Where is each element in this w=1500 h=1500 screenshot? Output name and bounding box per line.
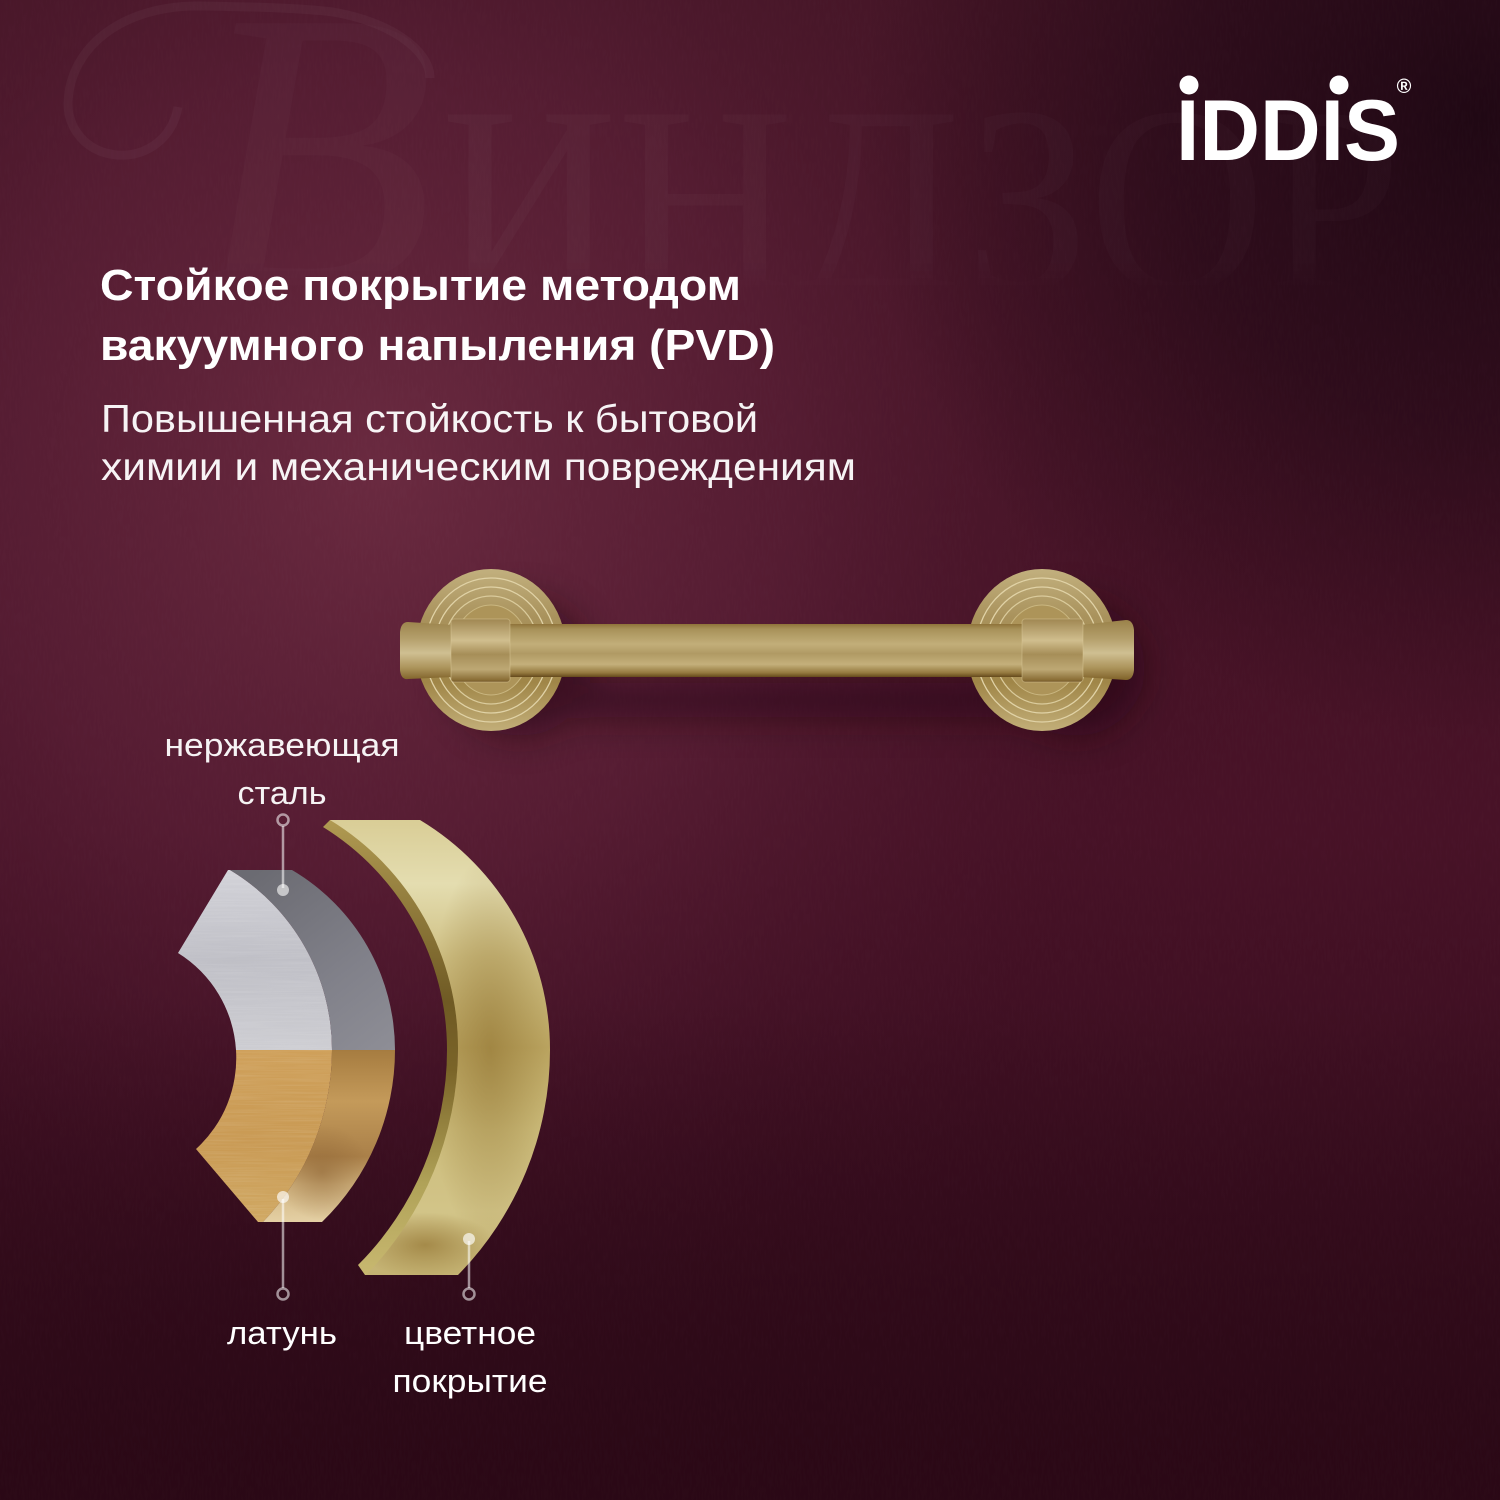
label: colour coating: покрытие: [392, 1363, 548, 1399]
brass band: [263, 1050, 395, 1222]
heading: [100, 261, 775, 370]
pointer: brass: [277, 1191, 289, 1300]
right rosette: [967, 569, 1117, 731]
logo: IDDIS: IDDIS: [1176, 83, 1400, 179]
cross-section: steel and brass layers: [178, 870, 395, 1222]
label: stainless steel: [164, 727, 400, 811]
subheading: Повышенная стойкость к бытовой: [101, 398, 758, 441]
label: stainless steel: сталь: [238, 775, 326, 811]
logo: IDDIS: ®: [1397, 76, 1412, 98]
left rosette: [416, 569, 566, 731]
left collar: [451, 619, 510, 682]
heading: вакуумного напыления (PVD): [100, 321, 775, 370]
right collar: [1022, 619, 1083, 682]
label: stainless steel: нержавеющая: [164, 727, 400, 763]
coating shade: middle: [330, 820, 550, 1275]
coating face: [330, 820, 550, 1275]
pointer: coating: [463, 1233, 475, 1300]
right end cap: [1080, 620, 1134, 680]
watermark: collection name: [366, 24, 426, 78]
handle shadow: [450, 600, 1145, 736]
subheading: химии и механическим повреждениям: [101, 446, 856, 489]
label: colour coating: цветное: [404, 1315, 536, 1351]
steel core face: [178, 870, 332, 1050]
coating shade: bottom: [330, 820, 550, 1275]
brass core face: [196, 1050, 332, 1222]
heading: Стойкое покрытие методом: [100, 261, 741, 310]
handle: brushed brass towel bar: [400, 569, 1145, 736]
brass band shade: [263, 1050, 395, 1222]
brushed texture: [178, 870, 332, 1222]
coating edge: [323, 820, 458, 1275]
left end cap: [400, 622, 454, 679]
label: colour coating: [392, 1315, 548, 1399]
pointer: steel: [277, 814, 289, 896]
label: brass: латунь: [227, 1315, 337, 1351]
subheading: [101, 398, 856, 489]
watermark: collection name: ИНДЗОР: [441, 51, 1401, 349]
bar: [505, 624, 1030, 677]
steel band: [230, 870, 395, 1050]
cross-section: colour coating crescent: [323, 820, 550, 1275]
